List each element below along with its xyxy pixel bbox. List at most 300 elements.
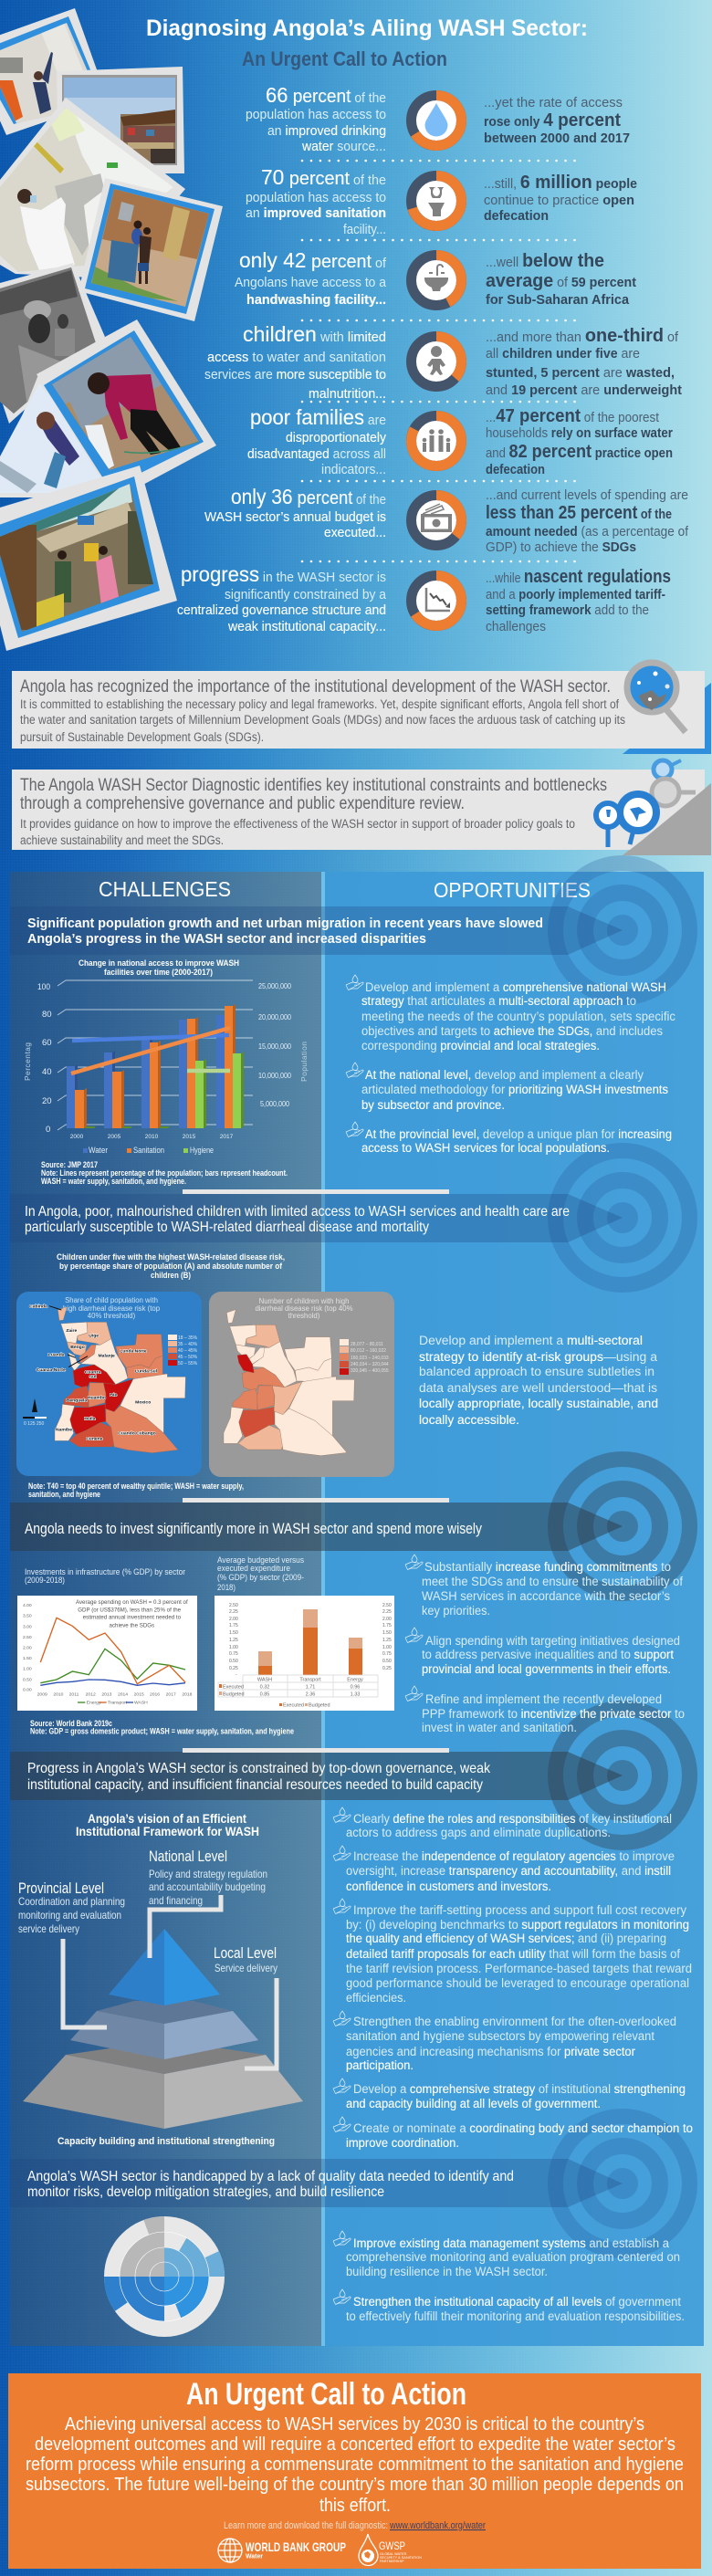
bullet text xyxy=(346,2121,693,2150)
bars xyxy=(67,1004,244,1128)
separator xyxy=(302,401,575,403)
bullet text: PPP framework to incentivize the private sector to xyxy=(422,1707,685,1721)
bullet text xyxy=(422,1560,683,1618)
bullet text xyxy=(361,1127,672,1155)
icon: hand and drop xyxy=(405,1628,423,1643)
axes labels: 0.00 xyxy=(23,1688,32,1693)
axis labels: 0 xyxy=(46,1125,50,1135)
chart title: investments: (2009-2018) xyxy=(25,1576,65,1586)
bullet text: Increase the independence of regulatory agencies to improve xyxy=(353,1849,675,1863)
separator xyxy=(302,560,575,562)
label: national level xyxy=(149,1848,267,1907)
section banner 3: Angola needs to invest significantly more in WASH sector and spend more wisely xyxy=(25,1521,483,1537)
left text xyxy=(235,248,387,308)
map A province labels: Moxico xyxy=(135,1400,151,1406)
map B legend xyxy=(340,1339,389,1375)
legend xyxy=(83,1146,214,1155)
logo: world bank group: WORLD BANK GROUP xyxy=(246,2539,346,2554)
map B title xyxy=(255,1297,353,1320)
divider bars xyxy=(183,1189,449,1753)
bullet text: Substantially increase funding commitments to xyxy=(424,1560,671,1574)
opportunities list 4 xyxy=(333,1807,693,2150)
map note: Note: T40 = top 40 percent of wealthy quintile; WASH = water supply, xyxy=(28,1482,244,1492)
chart source note xyxy=(30,1719,294,1736)
call to action body xyxy=(26,2414,684,2516)
bullet text: Improve the tariff-setting process and support full cost recovery xyxy=(353,1903,686,1917)
left text: access to water and sanitation xyxy=(207,351,386,365)
map A legend: 40 – 45% xyxy=(178,1348,198,1354)
opportunity text 2: strategy to identify at-risk groups —using a xyxy=(419,1350,657,1364)
left text xyxy=(177,562,387,634)
label: provincial level: service delivery xyxy=(18,1922,79,1935)
x labels: 2005 xyxy=(108,1134,121,1140)
axis labels: 0.50 xyxy=(229,1659,238,1664)
donut: progress xyxy=(411,575,462,626)
bullet text xyxy=(346,1903,692,2005)
label: provincial level: Provincial Level xyxy=(18,1880,104,1897)
panel body: It provides guidance on how to improve the effectiveness of the WASH sector in support of broader policy goals to xyxy=(20,817,575,831)
map A province labels: Lunda Norte xyxy=(120,1349,147,1355)
axes labels: 3.00 xyxy=(23,1624,32,1629)
icon: hand and drop xyxy=(346,1063,363,1077)
annotation: achieve the SDGs xyxy=(110,1623,154,1629)
chart title: facilities over time (2000-2017) xyxy=(104,968,213,978)
bullet text: detailed tariff proposals for each utility that will form the basis of xyxy=(346,1947,680,1961)
data table xyxy=(218,1675,378,1709)
bullet text: to effectively fulfill their monitoring and evaluation responsibilities. xyxy=(346,2309,685,2323)
target 4 xyxy=(555,1709,690,1842)
map A provinces xyxy=(29,1304,185,1453)
chart title: budgeted versus executed: 2018) xyxy=(217,1583,236,1593)
right text: between 2000 and 2017 xyxy=(484,131,630,146)
map A province labels: Benguela xyxy=(67,1398,87,1404)
legend: WASH xyxy=(134,1701,148,1706)
right text: ...and more than one-third of xyxy=(486,326,679,346)
opportunity text 2: locally appropriate, locally sustainable, and xyxy=(419,1397,658,1410)
map A province labels: Cunene xyxy=(86,1436,103,1441)
axis labels: 2.50 xyxy=(229,1603,238,1608)
photo: technician at control panel xyxy=(0,8,97,135)
right text xyxy=(486,406,673,477)
section banner 5: Angola’s WASH sector is handicapped by a lack of quality data needed to identify and xyxy=(27,2169,514,2184)
annotation: estimated annual investment needed to xyxy=(83,1615,182,1621)
bullet text: the quality and efficiency of WASH services; and (ii) preparing xyxy=(346,1932,666,1945)
icon: magnifier cluster xyxy=(596,760,696,847)
map B title: Number of children with high xyxy=(259,1297,349,1305)
bullet text: Refine and implement the recently developed xyxy=(425,1692,662,1706)
pyramid middle layer xyxy=(70,2001,258,2059)
bullet text: improve coordination. xyxy=(346,2136,459,2150)
icon: hand and drop xyxy=(333,2289,351,2304)
bullet text: efficiencies. xyxy=(346,1991,406,2005)
right text: continue to practice open xyxy=(484,194,634,208)
opportunities list 3 xyxy=(405,1555,685,1734)
section banner 1: Angola’s progress in the WASH sector and increased disparities xyxy=(27,931,426,947)
chart source note: Note: GDP = gross domestic product; WASH = water supply, sanitation, and hygiene xyxy=(30,1727,294,1736)
photo: market street xyxy=(57,67,184,173)
label: national level: Policy and strategy regulation xyxy=(149,1868,267,1880)
chart title: budgeted versus executed xyxy=(217,1555,304,1593)
label: national level: and financing xyxy=(149,1894,203,1907)
x labels: 2017 xyxy=(220,1134,234,1140)
map A province labels: Luanda xyxy=(48,1353,65,1358)
legend: Water xyxy=(89,1146,108,1155)
axes labels: 2016 xyxy=(150,1692,160,1698)
bullet text: by subsector and province. xyxy=(361,1098,505,1112)
map A province labels: Namibe xyxy=(56,1427,72,1432)
bullet text: sanitation and hygiene subsectors by empowering relevant xyxy=(346,2029,654,2043)
section banner 1: Significant population growth and net urban migration in recent years have slowed xyxy=(27,916,543,931)
stat row: progress xyxy=(177,562,671,634)
bullet text: Create or nominate a coordinating body and sector champion to xyxy=(353,2121,693,2135)
opportunities list 1 xyxy=(346,975,675,1155)
bullet text: confidence in customers and investors. xyxy=(346,1880,551,1893)
left text: only 36 percent of the xyxy=(231,485,386,508)
right text: ...while nascent regulations xyxy=(486,567,671,587)
label: local level: Local Level xyxy=(214,1944,277,1962)
opportunity text 2 xyxy=(419,1334,658,1427)
bullet text: by: (i) developing benchmarks to support regulators in monitoring xyxy=(346,1918,689,1932)
icon: hand and drop xyxy=(333,2079,351,2094)
map B legend: 80,012 – 160,022 xyxy=(351,1348,386,1354)
opportunity text 2: locally accessible. xyxy=(419,1413,519,1427)
icon: magnifier with puzzle xyxy=(627,663,686,732)
icon: hand and drop xyxy=(346,975,363,990)
bullet text: WASH services in accordance with the sector’s xyxy=(422,1589,670,1603)
map A province labels: Huambo xyxy=(88,1395,106,1400)
map A province labels: Cuanza xyxy=(85,1369,101,1375)
axis labels: 80 xyxy=(42,1010,52,1020)
left text: facility... xyxy=(343,223,386,237)
opportunity text 2: data analyses are well understood—that is xyxy=(419,1381,657,1395)
section banner 2: particularly susceptible to WASH-related diarrheal disease and mortality xyxy=(25,1220,429,1235)
bullet text: At the provincial level, develop a unique plan for increasing xyxy=(365,1127,672,1141)
left text xyxy=(246,165,386,237)
axis labels: 0.50 xyxy=(382,1659,392,1664)
axis labels: 0.25 xyxy=(229,1666,238,1671)
map A legend: 18 – 35% xyxy=(178,1335,198,1341)
bullet text xyxy=(422,1692,685,1734)
bullet text xyxy=(361,980,675,1052)
data table: 0.85 xyxy=(260,1692,269,1698)
map note: sanitation, and hygiene xyxy=(28,1490,100,1500)
right text: all children under five are xyxy=(486,347,640,361)
data table: Executed xyxy=(223,1685,244,1691)
axis labels: 100 xyxy=(37,982,50,992)
photo: lab technician at sink xyxy=(0,98,185,283)
photo: children at brick wall xyxy=(79,178,223,321)
icon: hand and drop xyxy=(333,2117,351,2132)
photo: woman in pink at tap xyxy=(37,319,216,500)
left text: population has access to xyxy=(246,191,386,205)
map figure title: children (B) xyxy=(151,1271,191,1281)
chart title xyxy=(79,958,239,978)
legend: Energy xyxy=(87,1701,101,1706)
section banner 3 xyxy=(10,1503,623,1551)
right text: ...and current levels of spending are xyxy=(486,488,688,503)
panel body xyxy=(20,697,625,744)
axis labels: 1.50 xyxy=(229,1630,238,1636)
left text: executed... xyxy=(324,526,386,540)
right text: stunted, 5 percent are wasted, xyxy=(486,366,675,381)
panel body xyxy=(20,817,575,847)
axes labels: 2.00 xyxy=(23,1645,32,1650)
left text: poor families are xyxy=(250,405,386,429)
map A province labels: Cabinda xyxy=(29,1304,47,1309)
right text: less than 25 percent of the xyxy=(486,503,672,523)
left text: water source... xyxy=(301,140,386,154)
chart title: Change in national access to improve WASH xyxy=(79,958,239,969)
section banner 2 xyxy=(10,1194,623,1242)
right text xyxy=(486,251,636,308)
stat row: budget execution xyxy=(204,485,689,555)
bullet text: invest in water and sanitation. xyxy=(422,1721,577,1734)
map figure title: by percentage share of population (A) and absolute number of xyxy=(59,1262,283,1272)
left text: population has access to xyxy=(246,108,386,122)
bullet text: and capacity building at all levels of government. xyxy=(346,2097,601,2110)
axis labels: 0.75 xyxy=(229,1651,238,1657)
x labels: 2015 xyxy=(183,1134,196,1140)
section banner 2: In Angola, poor, malnourished children with limited access to WASH services and health care are xyxy=(25,1204,570,1220)
axes labels xyxy=(23,1603,193,1698)
map B title: threshold) xyxy=(288,1312,320,1320)
bullet text: meet the SDGs and to ensure the sustainability of xyxy=(422,1575,683,1588)
panel heading xyxy=(20,775,607,813)
axis labels: 1.25 xyxy=(382,1638,392,1643)
map A province labels: Cuando Cubango xyxy=(118,1430,156,1436)
bullet text: Develop and implement a comprehensive national WASH xyxy=(365,980,666,994)
donut: 42 percent xyxy=(411,256,462,305)
right text xyxy=(486,567,671,634)
left text: 70 percent of the xyxy=(261,165,386,189)
logo: GWSP: SECURITY & SANITATION xyxy=(380,2556,422,2560)
right text xyxy=(484,173,637,224)
map A province labels: Sul xyxy=(89,1374,97,1379)
data table: WASH xyxy=(257,1678,272,1683)
axes labels: 2.50 xyxy=(23,1635,32,1640)
opportunity text 2: Develop and implement a multi-sectoral xyxy=(419,1334,643,1347)
call to action heading: An Urgent Call to Action xyxy=(186,2377,466,2412)
donut: children xyxy=(411,336,462,387)
left text xyxy=(204,322,386,402)
axes labels: 2013 xyxy=(101,1692,112,1698)
chart note: Source: JMP 2017 xyxy=(41,1160,98,1170)
gridlines xyxy=(58,980,253,1130)
right text xyxy=(484,96,630,146)
legend xyxy=(78,1701,148,1706)
data table: Budgeted xyxy=(309,1703,330,1709)
icon: hand and drop xyxy=(333,2011,351,2026)
chart title: budgeted versus executed: Average budgeted versus xyxy=(217,1555,304,1565)
icon: hand and drop xyxy=(333,1846,351,1860)
connector: national xyxy=(150,1895,221,1958)
section banner 5 xyxy=(10,2159,623,2207)
bullet text: corresponding provincial and local strategies. xyxy=(361,1039,600,1052)
axis labels: 20,000,000 xyxy=(258,1012,291,1021)
donut: 70 percent xyxy=(411,175,462,226)
photo: black and white portrait xyxy=(0,263,105,424)
right text xyxy=(486,488,689,555)
icon: hand and drop xyxy=(333,1899,351,1913)
left text: weak institutional capacity... xyxy=(227,620,386,634)
pyramid top layer xyxy=(109,1929,220,2005)
left text xyxy=(204,485,386,540)
axis labels: 1.75 xyxy=(229,1623,238,1628)
data table: 1.71 xyxy=(306,1685,315,1691)
panel body: It is committed to establishing the necessary policy and legal frameworks. Yet, despite significant efforts, Angola fell short of xyxy=(20,697,619,711)
map B legend: 240,034 – 320,044 xyxy=(351,1362,389,1367)
call to action body: Achieving universal access to WASH services by 2030 is critical to the country’s xyxy=(65,2414,644,2435)
framework title: Institutional Framework for WASH xyxy=(76,1824,259,1838)
left text: services are more susceptible to xyxy=(204,368,386,382)
map B legend: 320,045 – 400,055 xyxy=(351,1368,389,1374)
left text: children with limited xyxy=(243,322,386,346)
bullet text: the tariff revision process. Performance-based targets that reward xyxy=(346,1962,692,1975)
right text: amount needed (as a percentage of xyxy=(486,525,689,539)
bullet text xyxy=(346,2082,686,2110)
right text: ...still, 6 million people xyxy=(484,173,637,193)
axis labels: 1.00 xyxy=(229,1645,238,1650)
donut: 36 percent xyxy=(411,495,462,546)
right text: challenges xyxy=(486,620,546,634)
donut: 66 percent xyxy=(411,95,462,146)
section banner 4 xyxy=(10,1752,623,1800)
panel heading: through a comprehensive governance and public expenditure review. xyxy=(20,793,465,813)
opportunity text 2: balanced approach to ensure subtleties in xyxy=(419,1365,654,1378)
heading: opportunities: OPPORTUNITIES xyxy=(434,878,591,902)
map A compass and scale: 0 125 250 xyxy=(24,1421,44,1427)
target 1 xyxy=(555,864,690,997)
chart title: investments xyxy=(25,1567,185,1586)
map A province labels: Bengo xyxy=(70,1345,85,1350)
bullet text: articulated methodology for prioritizing WASH investments xyxy=(361,1083,668,1096)
section banner 4: institutional capacity, and insufficient financial resources needed to build capacity xyxy=(27,1777,483,1793)
map figure title xyxy=(57,1252,285,1281)
label: national level: and accountability budgeting xyxy=(149,1880,266,1893)
map A province labels: Lunda Sul xyxy=(135,1368,158,1374)
label: local level: Service delivery xyxy=(215,1962,277,1974)
photo: man at water tap xyxy=(0,372,100,497)
axes labels: 2015 xyxy=(134,1692,144,1698)
section banner 1 xyxy=(10,906,623,955)
panel: challenges column xyxy=(10,872,321,2346)
label: provincial level: monitoring and evaluation xyxy=(18,1909,121,1922)
bullet text: objectives and targets to achieve the SDGs, and includes xyxy=(361,1024,663,1038)
data table: 1.33 xyxy=(351,1692,360,1698)
label: provincial level xyxy=(18,1880,125,1935)
stat row: sanitation xyxy=(246,165,637,237)
axes labels: 2014 xyxy=(118,1692,128,1698)
bullet text xyxy=(346,1849,675,1893)
right text: and a poorly implemented tariff- xyxy=(486,588,665,602)
bullet text: Strengthen the enabling environment for the often-overlooked xyxy=(353,2015,676,2028)
pyramid diagram xyxy=(18,1848,303,2147)
axis labels: 20 xyxy=(42,1096,52,1106)
map B legend: 160,023 – 240,033 xyxy=(351,1356,389,1361)
bullet text xyxy=(346,2015,676,2072)
left text: significantly constrained by a xyxy=(225,588,387,602)
right text: for Sub-Saharan Africa xyxy=(486,293,630,308)
axis labels: 60 xyxy=(42,1038,52,1048)
legend: Hygiene xyxy=(190,1146,214,1155)
left text: disadvantaged across all xyxy=(247,447,386,462)
panel: urgent call to action xyxy=(8,2373,701,2569)
right text: setting framework add to the xyxy=(486,603,649,618)
chart title: investments: Investments in infrastructure (% GDP) by sector xyxy=(25,1567,185,1577)
left text: handwashing facility... xyxy=(246,293,386,308)
map panel B: number of children xyxy=(209,1292,394,1477)
bullet text: to address pervasive inequalities and to support xyxy=(422,1648,674,1661)
learn more line: Learn more and download the full diagnostic: xyxy=(224,2520,388,2531)
axes labels: 0.50 xyxy=(23,1677,32,1682)
map A title xyxy=(63,1296,161,1320)
left text: progress in the WASH sector is xyxy=(181,562,386,586)
chart note: Note: Lines represent percentage of the population; bars represent headcount. xyxy=(41,1168,288,1178)
bars xyxy=(258,1609,362,1675)
right text: ...47 percent of the poorest xyxy=(486,406,659,426)
bullet text: Align spending with targeting initiatives designed xyxy=(425,1634,680,1648)
stat row: handwashing xyxy=(235,248,636,308)
bullet text: comprehensive monitoring and evaluation program centered on xyxy=(346,2250,680,2264)
axis labels: 2.50 xyxy=(382,1603,392,1608)
icon: hand and drop xyxy=(333,1807,351,1822)
subtitle: An Urgent Call to Action xyxy=(242,47,447,70)
photo collage xyxy=(0,8,223,651)
bullet text: Develop a comprehensive strategy of institutional strengthening xyxy=(353,2082,686,2096)
heading: challenges: CHALLENGES xyxy=(99,877,231,901)
map panel A: share of child population xyxy=(16,1292,202,1476)
legend: Sanitation xyxy=(133,1146,164,1155)
separator xyxy=(302,239,575,241)
data table: Executed xyxy=(283,1703,304,1709)
icon: hand and drop xyxy=(346,1122,363,1137)
left text: an improved sanitation xyxy=(246,206,386,221)
left text: indicators... xyxy=(321,463,386,477)
donut: poor families xyxy=(411,416,462,466)
axis labels: 1.25 xyxy=(229,1638,238,1643)
right text: and 82 percent practice open xyxy=(486,442,673,462)
left text: disproportionately xyxy=(286,431,387,445)
left text: centralized governance structure and xyxy=(177,603,386,618)
label: local level xyxy=(214,1944,277,1974)
x labels: 2000 xyxy=(70,1134,84,1140)
axis labels: Population xyxy=(299,1042,309,1082)
left text: malnutrition... xyxy=(309,387,386,402)
call to action body: this effort. xyxy=(319,2496,391,2516)
right text: GDP) to achieve the SDGs xyxy=(486,540,636,555)
right text xyxy=(486,326,682,398)
map B provinces xyxy=(224,1310,354,1456)
map A province labels: Cuanza Norte xyxy=(37,1367,66,1373)
axis labels: 2.00 xyxy=(229,1617,238,1622)
right text: ...well below the xyxy=(486,251,604,271)
panel heading: Angola has recognized the importance of the institutional development of the WASH sector. xyxy=(20,677,611,696)
axis labels: 1.00 xyxy=(382,1645,392,1650)
stat row: children xyxy=(204,322,682,402)
bullet text: key priorities. xyxy=(422,1604,490,1618)
chart note: WASH = water supply, sanitation, and hygiene. xyxy=(41,1177,186,1187)
data table: 0.32 xyxy=(260,1685,269,1691)
right text: ...yet the rate of access xyxy=(484,96,623,110)
axis labels: 15,000,000 xyxy=(258,1042,291,1051)
axes labels: 2011 xyxy=(69,1692,79,1698)
connector: provincial xyxy=(63,1939,107,2027)
axes labels: 2010 xyxy=(53,1692,64,1698)
axis labels: Percentag xyxy=(23,1042,32,1081)
left text: only 42 percent of xyxy=(239,248,387,272)
pyramid caption: Capacity building and institutional strengthening xyxy=(58,2136,275,2147)
map A title: 40% threshold) xyxy=(88,1312,136,1320)
